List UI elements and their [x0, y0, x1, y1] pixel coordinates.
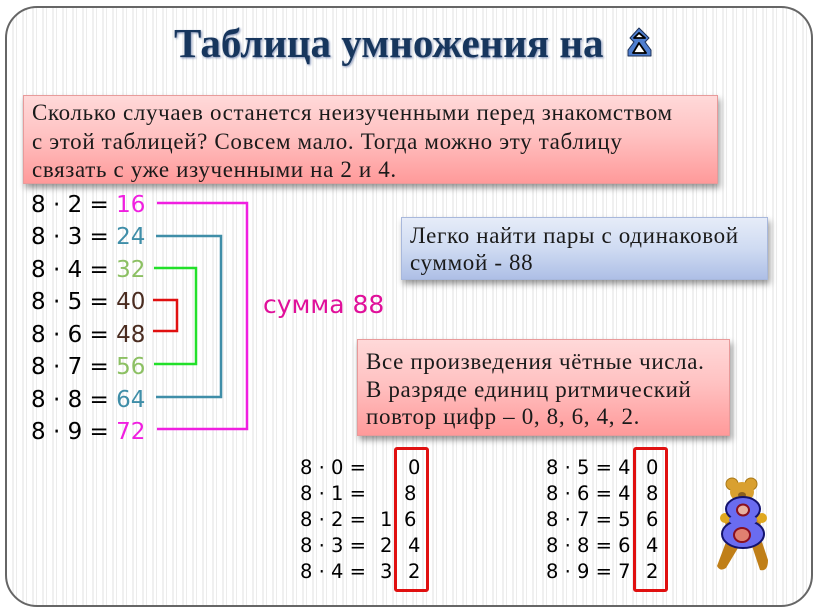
table: 8x5 to 8x9: 8	[646, 482, 658, 505]
row 8x8: 8 · 8 = 64	[31, 387, 145, 413]
table: 8x0 to 8x4: 1	[380, 508, 392, 531]
table: 8x0 to 8x4: 8 · 1 =	[300, 482, 366, 505]
icon: teddy bear holding 8	[717, 478, 768, 570]
table: 8x0 to 8x4: 2	[408, 560, 420, 583]
callout: intro question	[23, 95, 718, 184]
row 8x5: 8 · 5 = 40	[31, 289, 145, 315]
table: 8x0 to 8x4	[300, 456, 420, 583]
table: 8x5 to 8x9: 8 · 5 = 4	[546, 456, 631, 479]
callout: intro question: связать с уже изученными на 2 и 4.	[32, 157, 397, 182]
label: sum 88: сумма 88	[263, 290, 384, 319]
callout: pairs	[401, 217, 768, 280]
table: 8x5 to 8x9: 8 · 9 = 7	[546, 560, 631, 583]
row 8x3: 8 · 3 = 24	[31, 224, 145, 250]
row 8x6: 8 · 6 = 48	[31, 322, 145, 348]
highlight: units column left	[394, 447, 429, 592]
table: 8x5 to 8x9	[546, 456, 658, 583]
table: 8x0 to 8x4: 8 · 2 =	[300, 508, 366, 531]
multiplication list with sums	[31, 192, 145, 445]
callout: even products: повтор цифр – 0, 8, 6, 4, 2.	[366, 404, 640, 429]
table: 8x0 to 8x4: 3	[380, 560, 392, 583]
callout: even products: Все произведения чётные числа.	[366, 349, 705, 374]
table: 8x0 to 8x4: 8 · 3 =	[300, 534, 366, 557]
callout: even products: В разряде единиц ритмический	[366, 376, 692, 402]
table: 8x0 to 8x4: 0	[408, 456, 420, 479]
table: 8x0 to 8x4: 2	[380, 534, 392, 557]
table: 8x0 to 8x4: 8 · 4 =	[300, 560, 366, 583]
callout: intro question: Сколько случаев останется неизученными перед знакомством	[32, 100, 673, 125]
callout: pairs: суммой - 88	[410, 250, 533, 275]
row 8x7: 8 · 7 = 56	[31, 354, 145, 380]
row 8x9: 8 · 9 = 72	[31, 419, 145, 445]
callout: intro question: с этой таблицей? Совсем мало. Тогда можно эту таблицу	[32, 128, 623, 154]
callout: even products	[357, 339, 730, 436]
highlight: units column right	[633, 447, 668, 592]
table: 8x5 to 8x9: 6	[646, 508, 658, 531]
table: 8x0 to 8x4: 8	[404, 482, 416, 505]
row 8x4: 8 · 4 = 32	[31, 257, 145, 283]
table: 8x0 to 8x4: 6	[404, 508, 416, 531]
row 0: 8 · 0 =	[300, 456, 366, 479]
table: 8x5 to 8x9: 8 · 7 = 5	[546, 508, 631, 531]
table: 8x5 to 8x9: 8 · 8 = 6	[546, 534, 631, 557]
row 8x2: 8 · 2 = 16	[31, 192, 145, 218]
table: 8x5 to 8x9: 2	[646, 560, 658, 583]
table: 8x5 to 8x9: 4	[646, 534, 658, 557]
table: 8x0 to 8x4: 4	[408, 534, 420, 557]
title: Таблица умножения на	[174, 20, 603, 66]
callout: pairs: Легко найти пары с одинаковой	[410, 223, 739, 248]
table: 8x5 to 8x9: 0	[646, 456, 658, 479]
table: 8x5 to 8x9: 8 · 6 = 4	[546, 482, 631, 505]
icon: title digit 8	[628, 28, 652, 56]
